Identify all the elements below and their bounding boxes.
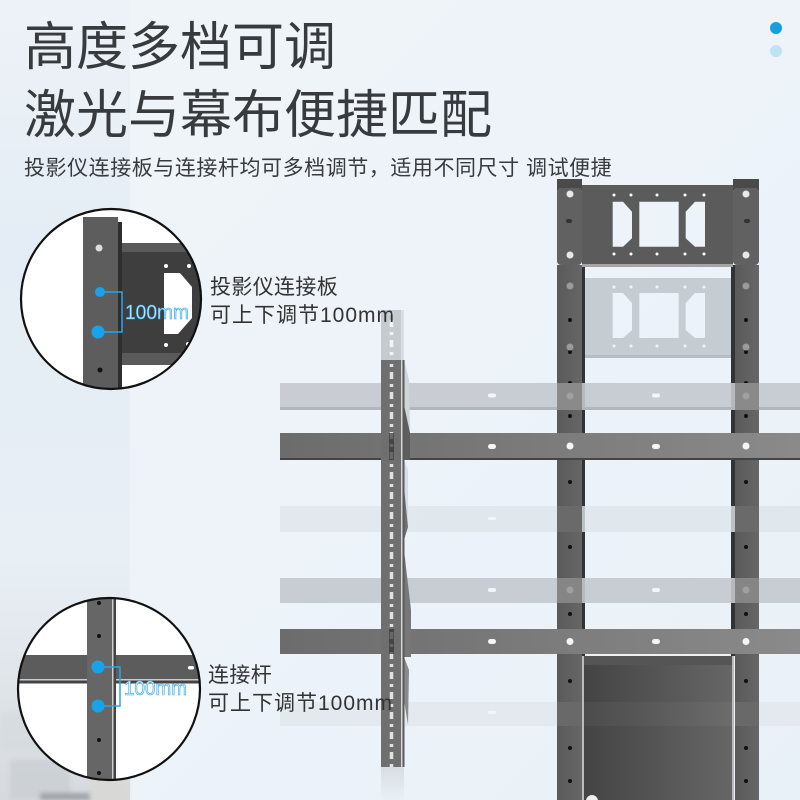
pagination dots: [770, 22, 782, 57]
label: connecting bar: 可上下调节100mm: [208, 692, 392, 715]
projector connecting plate: [557, 179, 759, 267]
dimension marker: 100mm lower: 100mm: [124, 678, 187, 700]
zoom circle: projector plate: [21, 209, 207, 397]
dimension marker: 100mm upper: [92, 287, 189, 338]
subtitle: 投影仪连接板与连接杆均可多档调节，适用不同尺寸 调试便捷: [24, 157, 612, 180]
slotted vertical rail: [381, 310, 411, 800]
title: 激光与幕布便捷匹配: [24, 87, 492, 145]
ghost projector plate: [566, 278, 750, 358]
label: projector plate: 可上下调节100mm: [210, 304, 394, 327]
label: connecting bar: 连接杆: [208, 664, 272, 687]
title: [24, 19, 492, 145]
zoom circle: connecting bar: [15, 595, 205, 785]
upright holes: [568, 318, 748, 783]
stand: uprights: [557, 265, 759, 800]
lower storage box: [584, 656, 732, 800]
label: connecting bar: [208, 664, 392, 715]
label: projector plate: 投影仪连接板: [210, 276, 338, 299]
dimension marker: 100mm upper: 100mm: [125, 302, 189, 324]
label: projector plate: [210, 276, 394, 327]
title: 高度多档可调: [24, 19, 336, 77]
ghost crossbeams: [280, 383, 800, 726]
dimension marker: 100mm lower: [92, 660, 187, 712]
crossbeams: [280, 433, 800, 654]
